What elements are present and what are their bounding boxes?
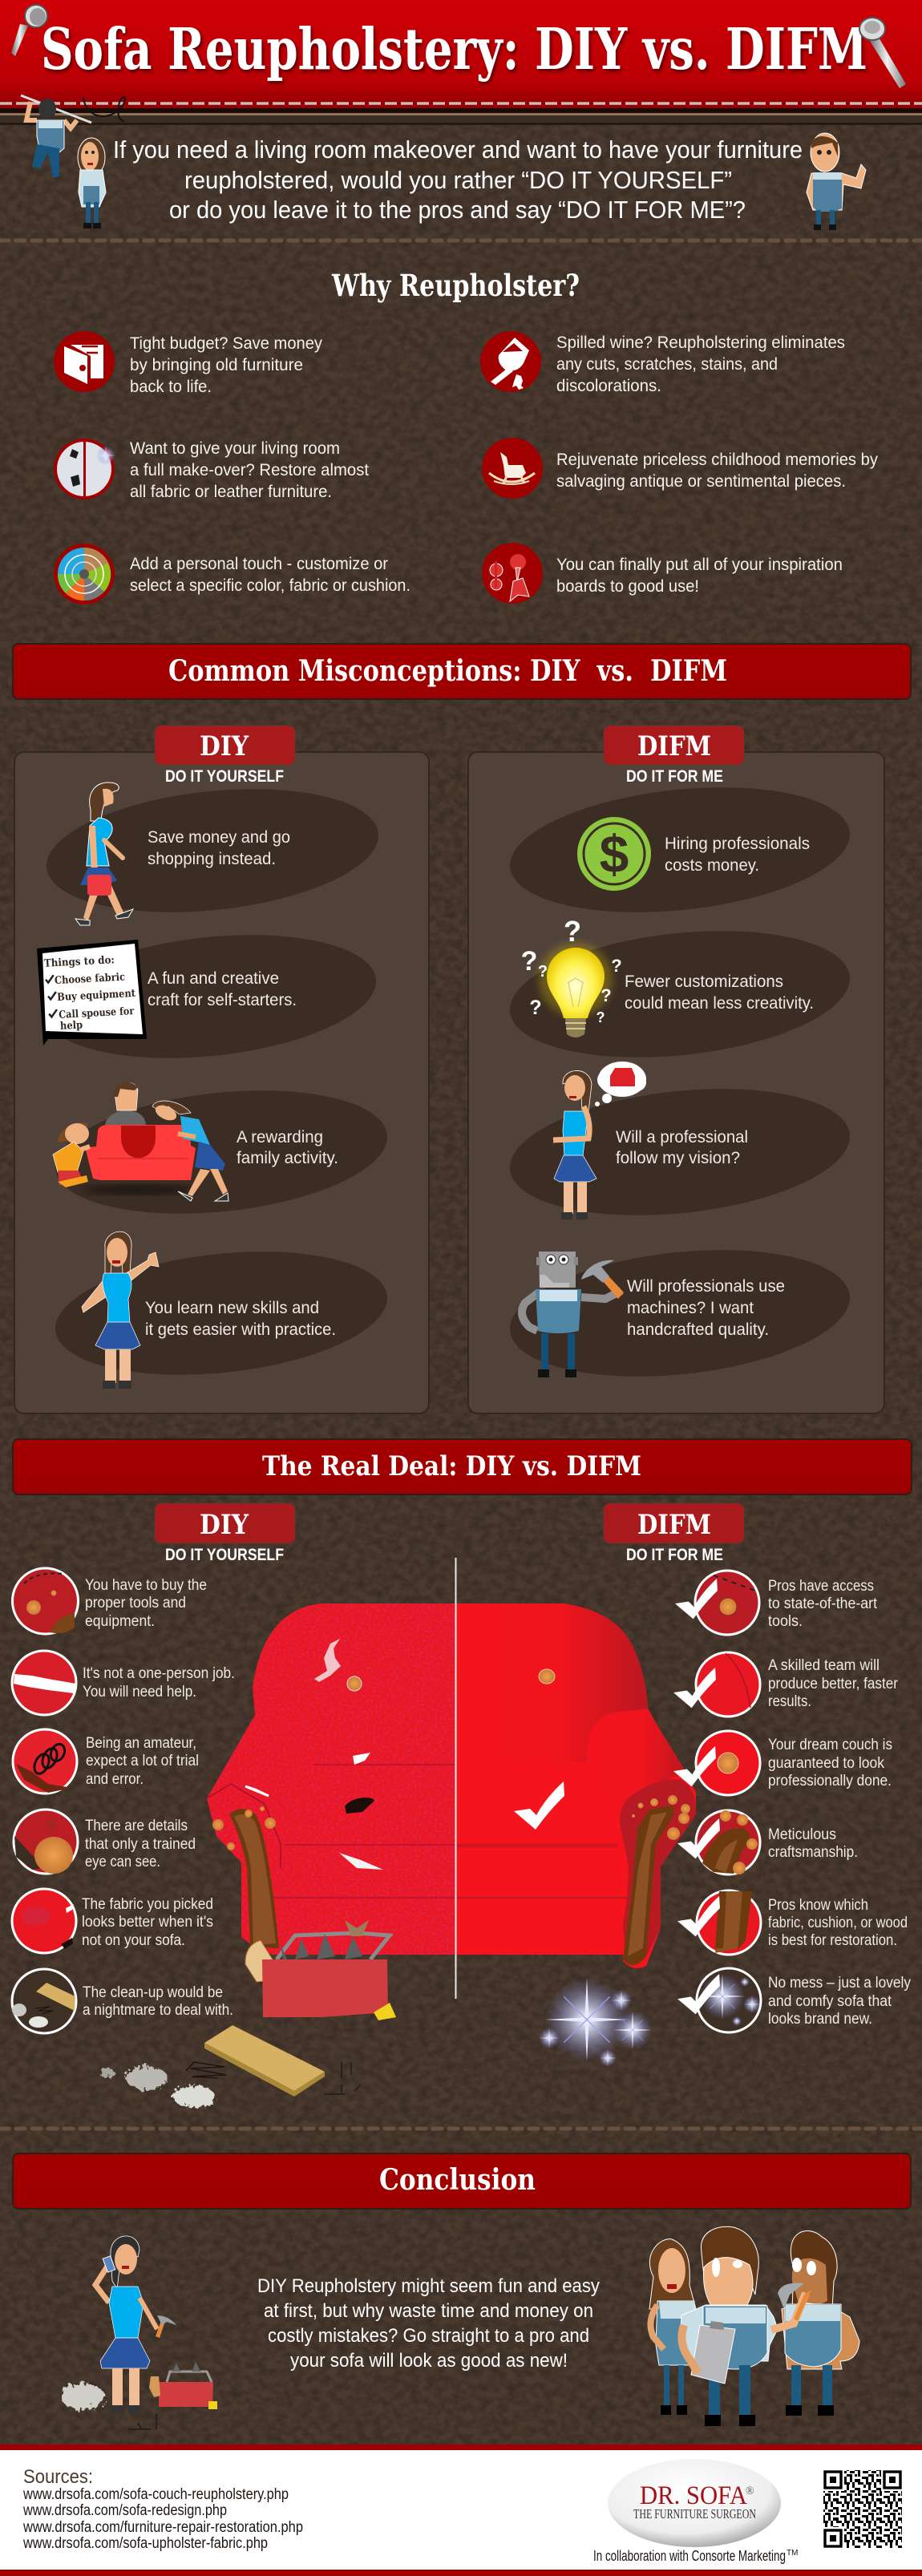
QR code <box>823 2470 902 2548</box>
item: not a one-person job: It's not a one-person job. <box>83 1665 235 1682</box>
item: pros know: is best for restoration. <box>768 1932 897 1949</box>
item: craftsmanship: craftsmanship. <box>768 1844 858 1861</box>
item: spilled wine: discolorations. <box>556 377 661 395</box>
thought bubble <box>595 1062 646 1106</box>
row: costs money <box>503 772 856 928</box>
conclusion text: your sofa will look as good as new! <box>290 2350 568 2372</box>
text: Will a professional <box>616 1128 748 1146</box>
item: childhood memories: salvaging antique or sentimental pieces. <box>556 472 846 491</box>
item: make-over: a full make-over? Restore almost <box>130 461 369 479</box>
row: save money <box>40 774 385 927</box>
text <box>627 1277 785 1339</box>
tab: real deal DIFM: DIFM <box>637 1509 711 1541</box>
text <box>237 1128 338 1167</box>
conclusion text: costly mistakes? Go straight to a pro and <box>268 2325 589 2347</box>
item: trained eye: eye can see. <box>85 1854 160 1870</box>
item: craftsmanship <box>677 1810 858 1874</box>
item: state-of-the-art tools: tools. <box>768 1613 803 1630</box>
note: things to do: Choose fabric <box>55 972 125 987</box>
item: childhood memories <box>482 438 878 499</box>
logo: Dr. Sofa: THE FURNITURE SURGEON <box>633 2506 756 2521</box>
banner: the real deal <box>13 1439 912 1494</box>
tab: DIY <box>155 726 295 765</box>
icon: light bulb with question marks: ? <box>521 946 537 977</box>
note: things to do: Buy equipment <box>57 988 135 1004</box>
item: dream couch <box>673 1731 892 1795</box>
sources: www.drsofa.com/furniture-repair-restoration.php <box>22 2519 303 2536</box>
icon: hammer <box>581 1260 624 1299</box>
pro: woman <box>649 2239 696 2415</box>
text: Hiring professionals <box>665 835 810 853</box>
intro text: reupholstered, would you rather “DO IT YOURSELF” <box>184 166 732 194</box>
sofa: damaged left half <box>200 1599 457 1960</box>
sources: www.drsofa.com/sofa-couch-reupholstery.php <box>22 2486 289 2503</box>
logo: Dr. Sofa <box>608 2459 781 2547</box>
item: state-of-the-art tools: Pros have access <box>768 1578 874 1595</box>
toolbox <box>245 1920 396 2020</box>
header: red leather band with title <box>0 0 922 125</box>
text <box>616 1128 748 1167</box>
logo: Dr. Sofa: ® <box>746 2485 754 2497</box>
item: fabric <box>12 1889 213 1953</box>
item: pros know: Pros know which <box>768 1897 868 1914</box>
text: could mean less creativity. <box>625 994 814 1013</box>
row: follow my vision <box>503 1062 856 1231</box>
item: dream couch: professionally done. <box>768 1773 892 1789</box>
icon: half-worn fabric <box>54 439 115 499</box>
item: personal touch <box>54 544 410 605</box>
item: tight budget: Tight budget? Save money <box>130 334 322 353</box>
logo: Dr. Sofa: DR. SOFA <box>640 2481 747 2510</box>
item: trained eye <box>14 1810 196 1874</box>
item: trial and error: Being an amateur, <box>86 1735 196 1752</box>
item: no mess: No mess – just a lovely <box>768 1975 911 1992</box>
item: tools: equipment. <box>85 1613 155 1630</box>
item: dream couch: guaranteed to look <box>768 1755 884 1772</box>
item: state-of-the-art tools: to state-of-the-art <box>768 1595 878 1612</box>
item: fabric: The fabric you picked <box>82 1896 213 1913</box>
item: tools <box>13 1568 207 1634</box>
character: woman thinking <box>553 1062 646 1219</box>
sofa: new right half <box>455 1603 696 1968</box>
item: trial and error <box>13 1729 199 1793</box>
label: do it for me: DO IT FOR ME <box>626 767 723 786</box>
item: dream couch: Your dream couch is <box>768 1737 892 1753</box>
icon: dollar coin <box>577 817 651 891</box>
row: fewer customizations <box>503 915 856 1073</box>
row: family activity <box>49 1076 394 1228</box>
item: no mess <box>677 1968 911 2032</box>
item: tight budget: back to life. <box>130 378 212 396</box>
tab: DIFM <box>604 726 744 765</box>
item: make-over: all fabric or leather furniture. <box>130 483 332 501</box>
item: craftsmanship: Meticulous <box>768 1826 836 1843</box>
sources: www.drsofa.com/sofa-redesign.php <box>22 2502 227 2519</box>
item: skilled team: produce better, faster <box>768 1676 899 1692</box>
text: You learn new skills and <box>145 1299 319 1317</box>
text: handcrafted quality. <box>627 1320 769 1339</box>
item: tools: proper tools and <box>85 1595 186 1612</box>
list: DIFM realities <box>673 1571 911 2032</box>
text <box>665 835 810 875</box>
icon: large check <box>514 1781 564 1830</box>
icon: light bulb with question marks: ? <box>538 963 548 981</box>
item: clean-up <box>12 1969 233 2033</box>
item: skilled team: A skilled team will <box>768 1657 880 1674</box>
intro text <box>113 135 803 224</box>
sources: www.drsofa.com/sofa-upholster-fabric.php <box>22 2535 268 2552</box>
item: trained eye: There are details <box>85 1818 188 1834</box>
characters: team of three pros <box>649 2226 859 2426</box>
text: A rewarding <box>237 1128 323 1146</box>
text <box>145 1299 336 1339</box>
tab: real deal DIY <box>155 1503 295 1543</box>
item: skilled team <box>673 1652 899 1717</box>
text: follow my vision? <box>616 1149 740 1167</box>
icon: right nail <box>859 18 906 88</box>
text: Will professionals use <box>627 1277 785 1296</box>
illustration: family moving a sofa <box>53 1082 228 1201</box>
tab: real deal DIY: DIY <box>200 1509 249 1541</box>
item: fabric: looks better when it's <box>82 1914 213 1931</box>
character: woman thumbs up <box>82 1231 159 1389</box>
small toolbox and debris <box>61 2362 217 2429</box>
item: tight budget <box>54 331 322 396</box>
character: woman walking with bag <box>75 783 133 925</box>
tab: DIFM: DIFM <box>637 730 711 762</box>
text: shopping instead. <box>148 850 276 868</box>
sources <box>22 2466 303 2552</box>
footer: white band with sources, logo and QR <box>0 2445 922 2576</box>
icon: light bulb with question marks: ? <box>611 956 622 976</box>
debris: plank, stuffing, spring, tacks <box>100 2025 361 2108</box>
icon: colour wheel <box>54 544 115 605</box>
item: personal touch: Add a personal touch - customize or <box>130 555 388 573</box>
banner: conclusion <box>13 2153 911 2209</box>
text <box>148 828 290 868</box>
item: make-over: Want to give your living room <box>130 439 340 458</box>
pro: man centre <box>680 2226 811 2426</box>
panel: DIFM misconceptions <box>468 726 884 1413</box>
text: craft for self-starters. <box>148 991 297 1009</box>
icon: rocking horse <box>482 438 543 499</box>
text: Save money and go <box>148 828 290 847</box>
row: fun craft <box>37 920 382 1073</box>
item: clean-up: The clean-up would be <box>83 1984 223 2001</box>
item: trained eye: that only a trained <box>85 1836 196 1853</box>
item: personal touch: select a specific color, fabric or cushion. <box>130 576 410 595</box>
intro text: If you need a living room makeover and want to have your furniture <box>113 135 803 164</box>
character: man sewing with needle <box>21 95 125 178</box>
character: robot with hammer <box>522 1252 624 1377</box>
icon: door box <box>54 331 115 392</box>
icon: left nail <box>11 5 47 56</box>
item: fabric: not on your sofa. <box>82 1932 185 1949</box>
item: trial and error: and error. <box>86 1771 144 1788</box>
conclusion text <box>257 2275 600 2372</box>
note: things to do <box>37 940 147 1045</box>
item: inspiration boards: boards to good use! <box>556 577 699 596</box>
item: tools: You have to buy the <box>85 1577 207 1594</box>
item: trial and error: expect a lot of trial <box>86 1753 199 1769</box>
collaboration credit: TM <box>787 2549 798 2558</box>
label: do it yourself: DO IT YOURSELF <box>165 767 284 786</box>
banner: common misconceptions <box>13 644 911 699</box>
character: woman on phone with toolbox <box>61 2236 217 2429</box>
sparkles <box>539 1978 652 2067</box>
text: A fun and creative <box>148 969 279 988</box>
conclusion text: DIY Reupholstery might seem fun and easy <box>257 2275 600 2297</box>
label: real deal do it for me: DO IT FOR ME <box>626 1546 723 1564</box>
text <box>148 969 297 1009</box>
tab: DIY: DIY <box>200 730 249 762</box>
tab: real deal DIFM <box>604 1503 744 1543</box>
row: new skills <box>49 1231 394 1389</box>
icon: light bulb with question marks: ? <box>529 997 542 1019</box>
conclusion text: at first, but why waste time and money on <box>264 2300 593 2322</box>
icon: light bulb with question marks: ? <box>596 1009 605 1025</box>
item: tight budget: by bringing old furniture <box>130 356 303 374</box>
text: Fewer customizations <box>625 973 783 991</box>
panel: why reupholster items <box>54 331 878 605</box>
character: woman, arms folded <box>77 138 106 228</box>
item: clean-up: a nightmare to deal with. <box>83 2002 233 2019</box>
banner: the real deal: The Real Deal: DIY vs. DIFM <box>262 1450 641 1482</box>
icon: wine glass <box>480 331 541 392</box>
item: pros know <box>677 1891 908 1955</box>
sources: Sources: <box>23 2466 93 2488</box>
label: real deal do it yourself: DO IT YOURSELF <box>165 1546 284 1564</box>
item: not a one-person job <box>12 1651 235 1715</box>
stitch line <box>0 239 922 242</box>
text <box>625 973 814 1013</box>
note: things to do: Call spouse for <box>59 1005 135 1021</box>
note: things to do: help <box>60 1019 83 1033</box>
collaboration credit: In collaboration with Consorte Marketing <box>593 2548 786 2564</box>
item: no mess: looks brand new. <box>768 2011 872 2028</box>
text: costs money. <box>665 856 759 875</box>
character: man waving <box>807 133 866 230</box>
list: DIY realities <box>12 1568 235 2033</box>
item: inspiration boards: You can finally put all of your inspiration <box>556 556 843 574</box>
pro: man right <box>782 2231 859 2416</box>
icon: dollar coin: $ <box>600 824 629 884</box>
icon: light bulb with question marks: ? <box>564 915 581 948</box>
banner: common misconceptions: Common Misconceptions: DIY vs. DIFM <box>168 654 727 688</box>
banner: conclusion: Conclusion <box>379 2163 536 2197</box>
icon: light bulb with question marks: ? <box>601 985 612 1005</box>
clipboard <box>691 2321 735 2384</box>
item: spilled wine: any cuts, scratches, stains, and <box>556 355 778 374</box>
item: no mess: and comfy sofa that <box>768 1993 892 2010</box>
text: it gets easier with practice. <box>145 1320 336 1339</box>
panel: DIY misconceptions <box>14 726 429 1413</box>
item: inspiration boards <box>482 543 843 604</box>
item: skilled team: results. <box>768 1693 811 1710</box>
intro text: or do you leave it to the pros and say “DO IT FOR ME”? <box>169 196 746 224</box>
stitch line <box>0 2126 922 2131</box>
item: make-over <box>54 439 369 501</box>
item: spilled wine: Spilled wine? Reupholstering eliminates <box>556 334 845 352</box>
note: things to do: Things to do: <box>44 954 115 970</box>
item: not a one-person job: You will need help. <box>83 1684 196 1700</box>
illustration: half-damaged, half-new sofa <box>100 1558 696 2108</box>
text: family activity. <box>237 1149 338 1167</box>
item: childhood memories: Rejuvenate priceless childhood memories by <box>556 451 878 469</box>
text: machines? I want <box>627 1299 754 1317</box>
icon: light bulb with question marks <box>521 915 622 1037</box>
row: machines <box>503 1235 856 1392</box>
item: state-of-the-art tools <box>675 1571 878 1635</box>
heading: Why Reupholster?: Why Reupholster? <box>331 268 580 303</box>
divider line <box>455 1558 457 1999</box>
item: spilled wine <box>480 331 845 395</box>
icon: push pins <box>482 543 543 604</box>
